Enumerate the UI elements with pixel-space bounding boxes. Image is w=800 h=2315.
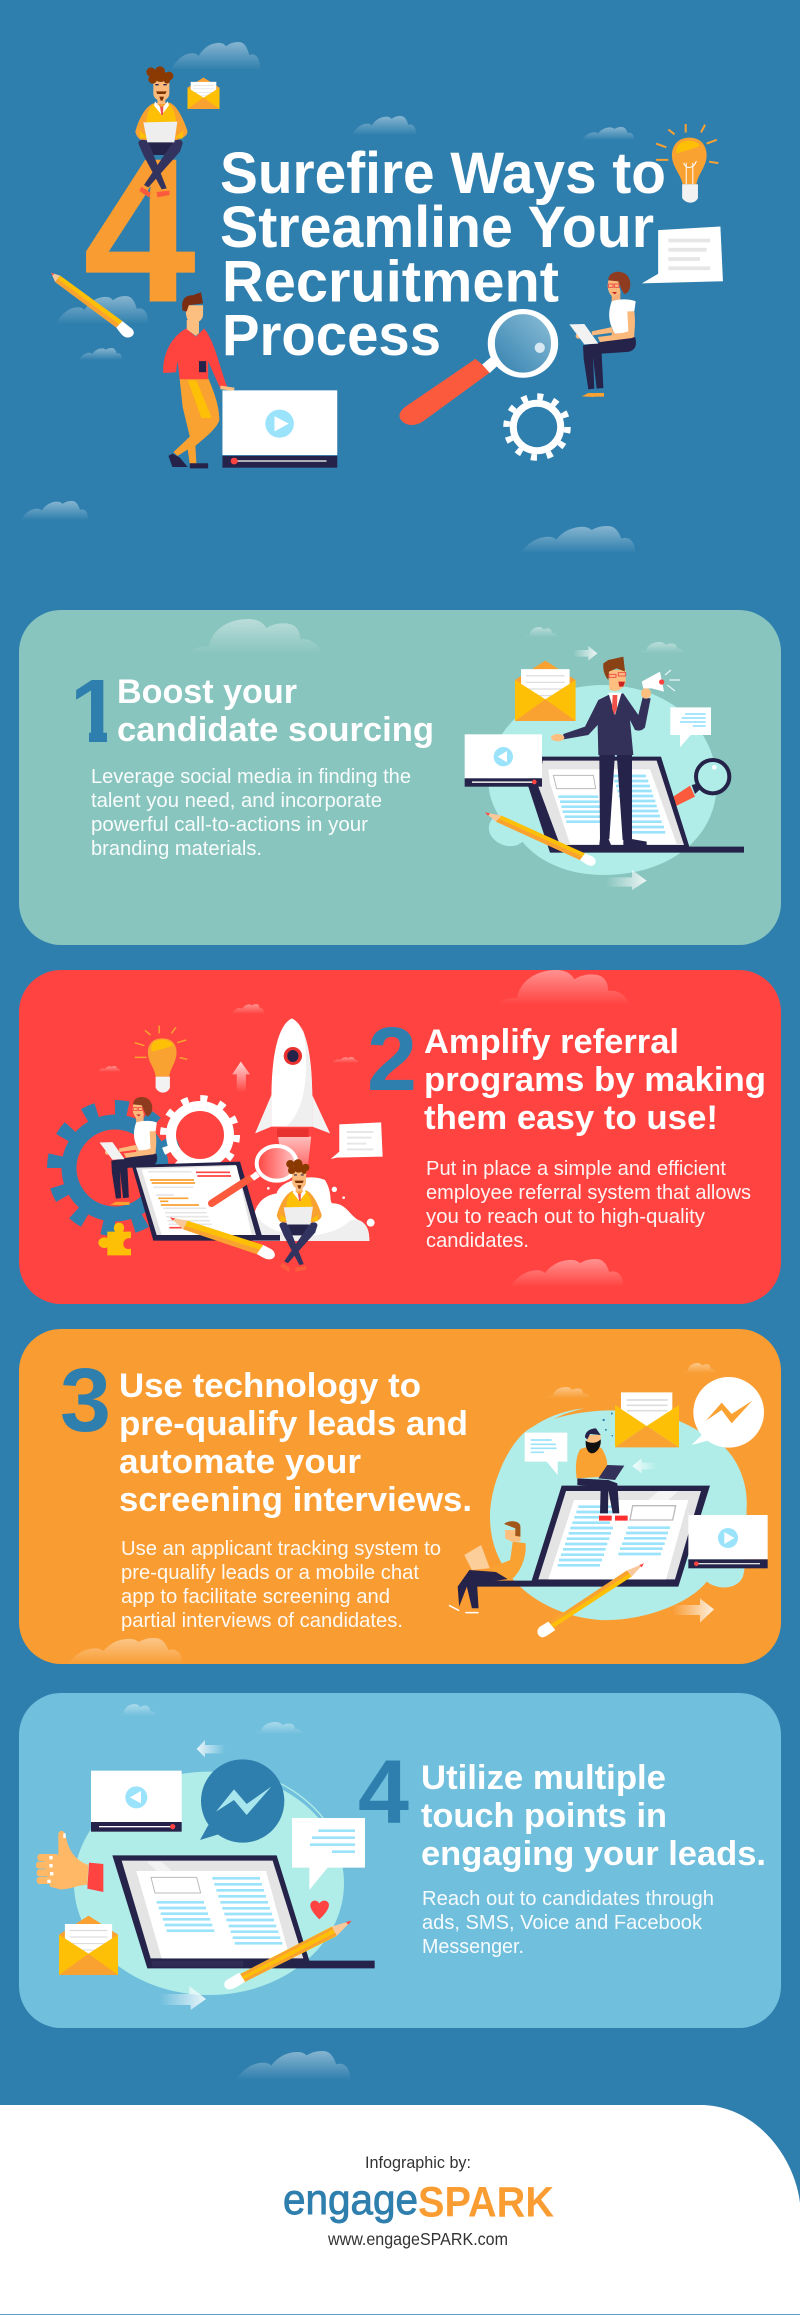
body text: candidates. xyxy=(426,1229,529,1252)
envelope xyxy=(59,1916,118,1975)
body text xyxy=(91,765,411,860)
illustration: laptop with engagement icons xyxy=(36,1740,375,2010)
white gear xyxy=(164,1099,236,1171)
laptop, cloud, pencil, magnifier xyxy=(98,1146,375,1259)
header panel xyxy=(21,42,723,553)
arrows xyxy=(632,1458,714,1623)
panel 3: use technology xyxy=(19,1329,781,1664)
icon: envelope xyxy=(188,78,220,109)
body text: pre-qualify leads or a mobile chat xyxy=(121,1561,419,1584)
logo: engageSPARK: SPARK xyxy=(418,2178,554,2226)
figure: seated man with laptop xyxy=(449,1521,526,1613)
clouds xyxy=(118,1704,303,1734)
messenger bubble xyxy=(692,1377,764,1448)
speech bubble xyxy=(525,1433,567,1475)
footer xyxy=(0,2105,800,2315)
number 2: 2 xyxy=(367,1010,417,1110)
heading: pre-qualify leads and xyxy=(119,1405,468,1443)
panel 2: amplify referral programs xyxy=(19,970,781,1304)
laptop xyxy=(528,757,744,853)
heading: Boost your xyxy=(117,673,297,711)
businessman xyxy=(551,657,680,845)
body text xyxy=(121,1537,441,1632)
figure: man with laptop sitting on the 4 xyxy=(135,66,187,198)
heading xyxy=(421,1759,766,1873)
body text xyxy=(422,1887,714,1958)
body text: partial interviews of candidates. xyxy=(121,1609,403,1632)
video card xyxy=(688,1515,768,1568)
large numeral 4: 4 xyxy=(83,116,196,346)
blue gear xyxy=(55,1108,175,1228)
heading: them easy to use! xyxy=(424,1099,718,1137)
magnifier xyxy=(673,760,729,806)
body text: powerful call-to-actions in your xyxy=(91,813,368,836)
number 4: 4 xyxy=(358,1742,409,1842)
backdrop circle xyxy=(74,1772,344,1995)
heart xyxy=(310,1901,329,1919)
figure: woman with laptop xyxy=(99,1097,157,1205)
credit line: Infographic by: xyxy=(365,2153,471,2172)
heading: touch points in xyxy=(421,1797,667,1835)
body text xyxy=(426,1157,751,1252)
icon: pencil xyxy=(51,273,134,338)
clouds: header background xyxy=(21,42,635,553)
icon: gear xyxy=(506,396,568,458)
body text: you to reach out to high-quality xyxy=(426,1205,706,1228)
video player card xyxy=(222,390,337,468)
figure: man with laptop xyxy=(277,1159,322,1272)
body text: talent you need, and incorporate xyxy=(91,789,382,812)
heading: Amplify referral xyxy=(424,1023,679,1061)
heading xyxy=(119,1367,472,1519)
figure: woman with laptop xyxy=(569,272,636,397)
body text: branding materials. xyxy=(91,837,262,860)
clouds xyxy=(191,619,684,653)
thumbs up xyxy=(36,1831,103,1892)
laptop xyxy=(474,1486,710,1587)
cloud above footer xyxy=(236,2051,350,2080)
clouds xyxy=(68,1363,716,1664)
heading: candidate sourcing xyxy=(117,711,434,749)
envelope xyxy=(615,1392,679,1447)
illustration: businessman on laptop xyxy=(465,646,744,890)
heading: Use technology to xyxy=(119,1367,421,1405)
laptop xyxy=(112,1855,375,1968)
video card xyxy=(465,734,542,787)
speech bubble xyxy=(670,707,711,747)
number 3: 3 xyxy=(60,1351,111,1451)
pencil xyxy=(224,1921,352,1989)
heading xyxy=(117,673,434,749)
panel 1: boost candidate sourcing xyxy=(19,610,781,945)
video card xyxy=(91,1771,182,1832)
logo: engageSPARK xyxy=(283,2176,554,2226)
body text: Reach out to candidates through xyxy=(422,1887,714,1910)
body text: ads, SMS, Voice and Facebook xyxy=(422,1911,703,1934)
backdrop circle xyxy=(488,685,717,875)
backdrop blob xyxy=(490,1410,747,1620)
rocket and lightbulb xyxy=(135,1018,383,1182)
body text: employee referral system that allows xyxy=(426,1181,751,1204)
illustration: gears, rocket and team xyxy=(55,1018,383,1272)
title xyxy=(220,141,666,368)
illustration: laptop with chat apps xyxy=(474,1377,768,1637)
heading: automate your xyxy=(119,1443,361,1481)
title: Streamline Your xyxy=(220,195,654,260)
body text: app to facilitate screening and xyxy=(121,1585,390,1608)
speech bubble xyxy=(292,1818,365,1890)
envelope xyxy=(515,661,576,721)
speech bubble xyxy=(642,226,723,283)
title: Recruitment xyxy=(222,250,559,314)
icon: lightbulb xyxy=(656,124,718,203)
clouds xyxy=(98,970,629,1287)
number 1: 1 xyxy=(70,662,120,762)
logo: engageSPARK: engage xyxy=(283,2176,418,2224)
bearded man on laptop xyxy=(576,1413,628,1521)
website: www.engageSPARK.com xyxy=(327,2229,508,2249)
messenger bubble xyxy=(200,1759,284,1843)
title: Surefire Ways to xyxy=(220,141,666,206)
arrows xyxy=(160,1740,225,2010)
title: Process xyxy=(222,303,441,368)
pencil xyxy=(485,812,596,866)
heading: Utilize multiple xyxy=(421,1759,666,1797)
heading: programs by making xyxy=(424,1061,766,1099)
body text: Use an applicant tracking system to xyxy=(121,1537,441,1560)
body text: Put in place a simple and efficient xyxy=(426,1157,726,1180)
body text: Messenger. xyxy=(422,1935,524,1958)
figure: man in red sweater xyxy=(163,292,235,468)
heading: screening interviews. xyxy=(119,1481,472,1519)
heading xyxy=(424,1023,766,1137)
panel 4: multiple touch points xyxy=(19,1693,781,2028)
arrows xyxy=(573,646,647,890)
pencil xyxy=(537,1563,644,1637)
body text: Leverage social media in finding the xyxy=(91,765,411,788)
icon: magnifying glass xyxy=(399,312,555,425)
heading: engaging your leads. xyxy=(421,1835,766,1873)
